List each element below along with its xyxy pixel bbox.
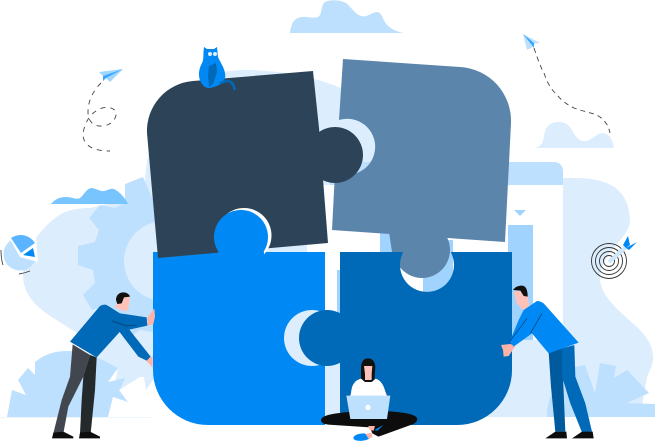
paper plane: left xyxy=(99,69,123,82)
phone top bar xyxy=(330,162,563,185)
deep blue knob xyxy=(299,310,355,366)
puzzle piece: steel blue top right xyxy=(332,59,511,278)
bright blue knob xyxy=(214,208,272,264)
legs xyxy=(549,348,565,432)
face and neck xyxy=(364,366,372,380)
man: left pushing xyxy=(52,292,155,438)
hand xyxy=(501,344,515,357)
phone lower section xyxy=(325,340,563,417)
background gear xyxy=(78,177,204,340)
background blob: right xyxy=(563,178,653,417)
background blob: behind puzzle xyxy=(145,70,385,260)
gear hub xyxy=(124,221,204,301)
cat xyxy=(199,47,234,89)
puzzle piece: dark navy top left xyxy=(147,71,363,258)
phone screen xyxy=(307,185,563,340)
face xyxy=(115,295,130,312)
hair xyxy=(116,292,130,304)
navy knob xyxy=(307,127,363,183)
man: right holding xyxy=(501,286,594,438)
puzzle piece cutout: pale crescent xyxy=(284,310,340,366)
dashed flight path: right xyxy=(534,48,610,133)
puzzle piece: deep blue bottom right xyxy=(299,252,512,425)
legs xyxy=(53,344,90,433)
legs xyxy=(321,411,417,437)
paper plane: right xyxy=(523,34,540,50)
cloud: right xyxy=(534,122,614,148)
shoes xyxy=(545,432,594,438)
cloud: left xyxy=(51,188,128,204)
face xyxy=(514,290,530,311)
hair xyxy=(361,358,375,382)
shirt xyxy=(350,379,386,397)
target icon xyxy=(592,236,637,278)
background blob: left xyxy=(23,200,170,417)
grass: white foreground xyxy=(108,377,175,417)
puzzle piece: bright blue bottom left xyxy=(153,252,325,425)
shoes xyxy=(52,432,100,438)
steel knob xyxy=(394,222,450,278)
pie chart icon xyxy=(1,235,38,274)
hands xyxy=(146,308,155,368)
dashed flight path: left xyxy=(83,83,116,151)
ground line xyxy=(0,417,153,418)
lower arm xyxy=(119,328,151,361)
hair xyxy=(513,286,528,297)
torso and upper arm xyxy=(70,305,147,357)
grass: right xyxy=(547,363,655,417)
laptop logo xyxy=(365,405,371,410)
woman with laptop xyxy=(321,358,417,441)
grass: left xyxy=(7,351,128,417)
foot xyxy=(353,425,383,441)
phone bars xyxy=(337,210,533,340)
laptop xyxy=(346,396,390,419)
cloud: top xyxy=(290,0,404,33)
arms xyxy=(350,391,388,397)
torso and arm xyxy=(510,301,579,353)
